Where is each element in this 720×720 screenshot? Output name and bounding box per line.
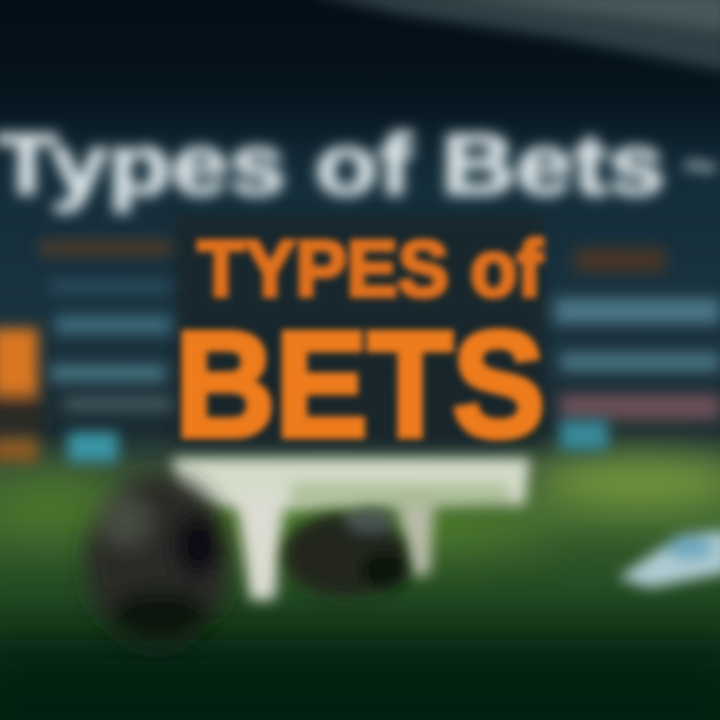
second dark ball (283, 508, 409, 597)
left orange sign (0, 328, 42, 462)
heading: blurred white title: ~ (682, 132, 718, 199)
title line: TYPES of: TYPES of (198, 224, 543, 313)
turf highlights (0, 458, 720, 720)
stands (40, 215, 720, 445)
stadium roof (300, 0, 720, 72)
heading: blurred white title: Types of Bets (0, 117, 665, 213)
boot on the right (618, 530, 720, 588)
title line: BETS: BETS (175, 300, 545, 468)
white banner (172, 458, 530, 600)
cyan pitch-side markers (68, 420, 608, 462)
soccer ball (86, 474, 230, 646)
